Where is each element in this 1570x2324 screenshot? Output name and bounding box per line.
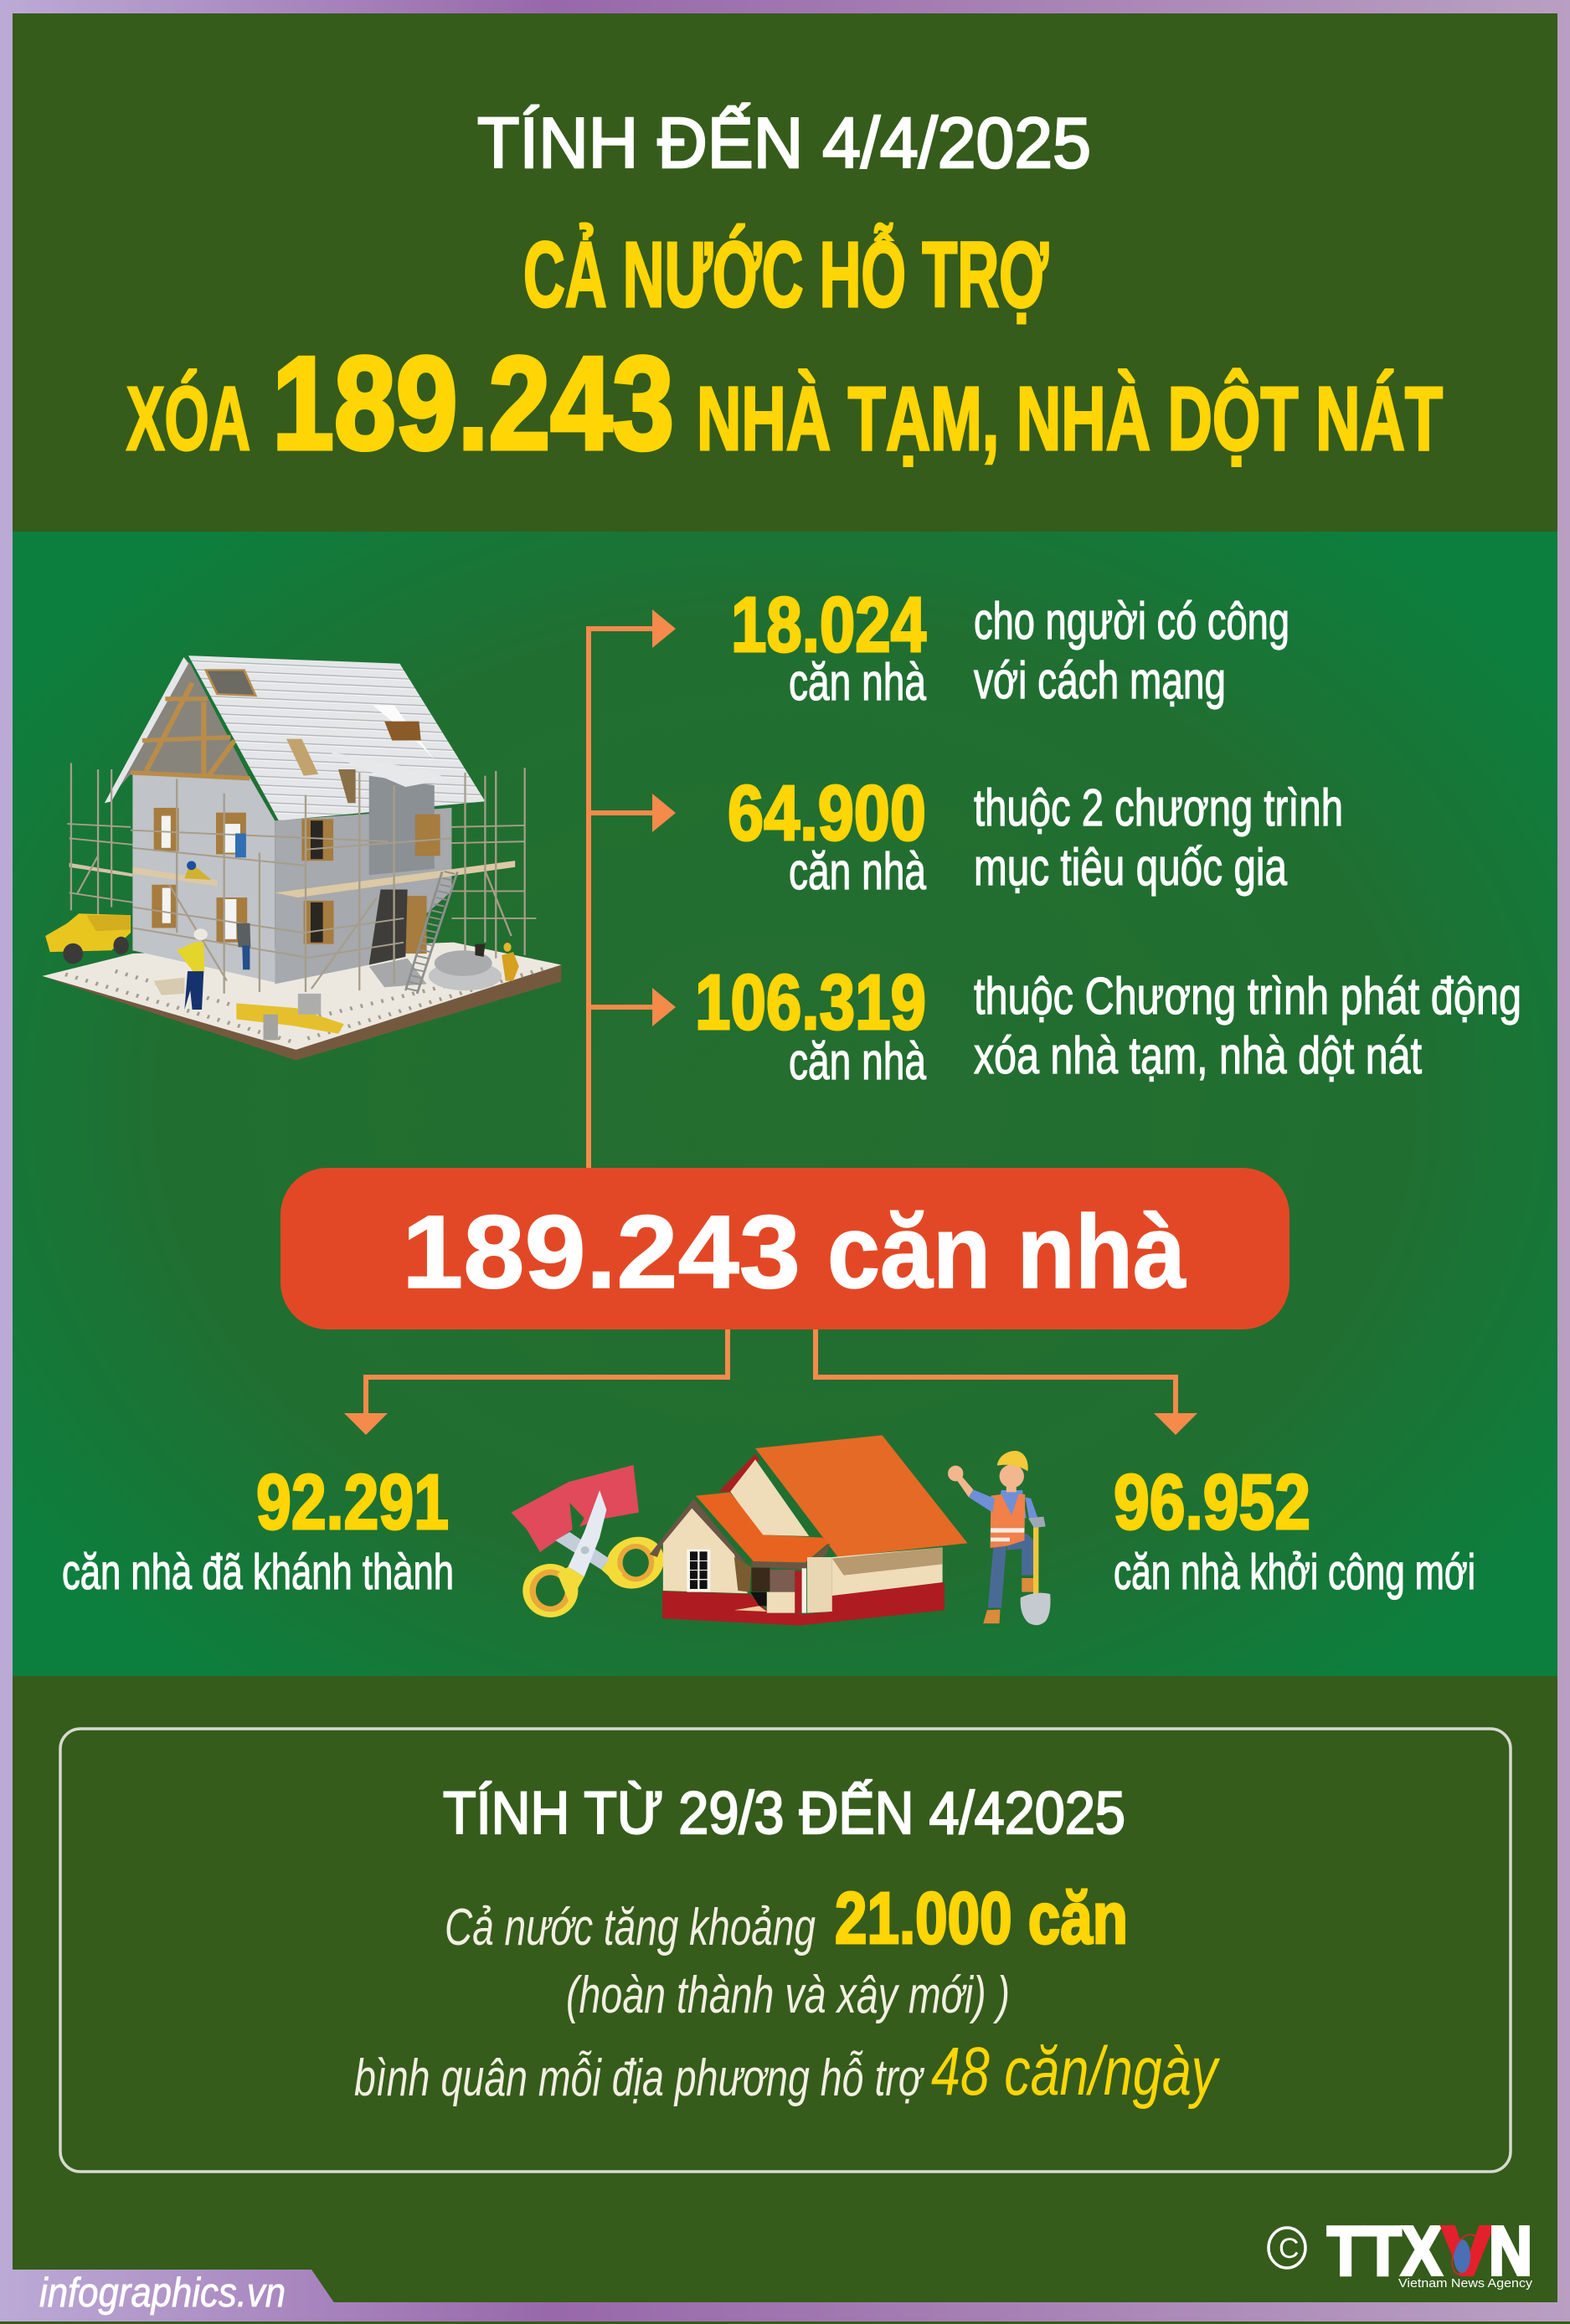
bottom strip bbox=[0, 2321, 1570, 2324]
callout: total houses pill bbox=[281, 1168, 1289, 1329]
panel: header bbox=[13, 13, 1557, 532]
footer tab: infographics.vn: infographics.vn bbox=[39, 2270, 286, 2316]
connector: left arrow to completed bbox=[344, 1329, 728, 1435]
callout: total houses pill: căn nhà bbox=[827, 1195, 1187, 1310]
icon: ribbon and scissors bbox=[512, 1465, 672, 1617]
logo: copyright and TTXVN: N bbox=[1489, 2212, 1532, 2290]
title: date line: TÍNH ĐẾN 4/4/2025 bbox=[477, 103, 1091, 183]
number: 18.024 bbox=[731, 581, 926, 668]
unit: căn nhà bbox=[789, 843, 926, 901]
logo: copyright and TTXVN bbox=[1269, 2212, 1533, 2291]
connector: right arrow to started bbox=[816, 1329, 1197, 1435]
logo: copyright and TTXVN: Vietnam News Agency bbox=[1398, 2276, 1533, 2291]
stat: newly started houses bbox=[1114, 1458, 1475, 1600]
rounded info box bbox=[60, 1729, 1511, 2172]
item: launched program bbox=[695, 959, 1521, 1091]
logo: copyright and TTXVN: TTX bbox=[1327, 2212, 1442, 2290]
box heading: TÍNH TỪ 29/3 ĐẾN 4/42025 bbox=[443, 1781, 1125, 1847]
callout: total houses pill: 189.243 bbox=[402, 1195, 800, 1310]
icon: orange roof house bbox=[650, 1435, 967, 1626]
text: completed and new: (hoàn thành và xây mới) ) bbox=[566, 1967, 1010, 2024]
illustration: scissors, house and worker bbox=[512, 1435, 1051, 1626]
panel: lower section bbox=[13, 1676, 1557, 2302]
text: nationwide increase: Cả nước tăng khoảng bbox=[445, 1899, 816, 1956]
unit: căn nhà bbox=[789, 1033, 926, 1091]
text: daily average: bình quân mỗi địa phương hỗ trợ bbox=[354, 2049, 924, 2107]
number: 64.900 bbox=[728, 769, 926, 856]
logo: copyright and TTXVN: V bbox=[1442, 2212, 1492, 2290]
unit: căn nhà bbox=[789, 654, 926, 712]
description line two: xóa nhà tạm, nhà dột nát bbox=[974, 1027, 1422, 1085]
number: per day: 48 căn/ngày bbox=[931, 2034, 1221, 2110]
description line two: với cách mạng bbox=[974, 652, 1226, 710]
description line two: mục tiêu quốc gia bbox=[974, 839, 1287, 897]
title: remove word: XÓA bbox=[126, 368, 250, 469]
description: thuộc 2 chương trình bbox=[974, 779, 1343, 837]
item: national target programs bbox=[728, 769, 1343, 901]
label: căn nhà đã khánh thành bbox=[62, 1545, 454, 1600]
item: people with merit bbox=[731, 581, 1289, 712]
stat: completed houses bbox=[62, 1458, 454, 1600]
number: increase: 21.000 căn bbox=[835, 1878, 1128, 1959]
panel: green statistics section bbox=[13, 532, 1557, 1677]
stat: newly started houses: 96.952 bbox=[1114, 1458, 1310, 1545]
icon: construction worker bbox=[948, 1451, 1051, 1625]
stat: completed houses: 92.291 bbox=[256, 1458, 449, 1545]
description: cho người có công bbox=[974, 593, 1289, 650]
arrow: item one bbox=[652, 609, 676, 648]
illustration: house under construction bbox=[42, 656, 561, 1060]
title: headline number: 189.243 bbox=[272, 330, 674, 477]
number: 106.319 bbox=[695, 959, 926, 1046]
arrow: item two bbox=[652, 794, 676, 832]
title: nationwide support: CẢ NƯỚC HỖ TRỢ bbox=[523, 224, 1048, 326]
arrow: item three bbox=[652, 988, 676, 1026]
connector: main vertical line with three arrows bbox=[589, 609, 676, 1168]
logo: copyright and TTXVN: C bbox=[1279, 2233, 1300, 2265]
